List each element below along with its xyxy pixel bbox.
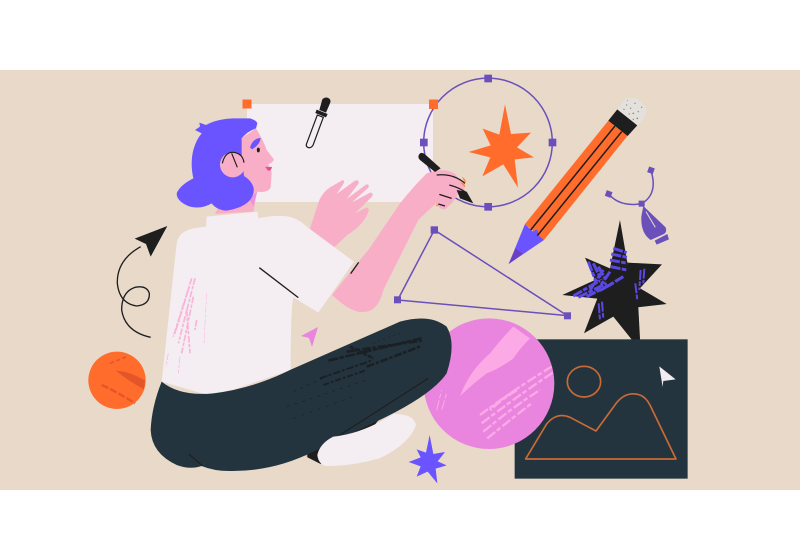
back foot <box>300 447 310 458</box>
finger lines <box>437 175 465 206</box>
stylus pen <box>418 153 441 172</box>
eyebrow <box>250 138 261 149</box>
icon: picture mountains <box>526 394 676 459</box>
icon: orange star <box>469 104 534 188</box>
head and hair <box>177 118 274 214</box>
paper artboard with handles <box>242 100 438 202</box>
pink textured planet <box>424 318 554 449</box>
icon: pen tool nib with bezier curve <box>605 166 669 245</box>
eye <box>257 148 260 152</box>
ear <box>220 152 245 177</box>
icon: picture sun <box>567 366 601 397</box>
mouth <box>265 167 272 171</box>
icon: curly arrow <box>117 226 167 337</box>
shoe <box>317 414 416 466</box>
face <box>242 128 274 192</box>
icon: black textured star <box>562 220 667 351</box>
icon: orange planet <box>88 352 146 409</box>
vector triangle with anchor points <box>394 226 571 319</box>
lower body <box>151 318 452 471</box>
fingernails <box>436 177 466 207</box>
sleeve lines <box>259 262 359 298</box>
icon: blue star <box>409 435 447 483</box>
person <box>151 118 473 471</box>
collar shadow <box>249 192 257 206</box>
hair <box>177 118 257 211</box>
shirt <box>162 212 359 397</box>
raised arm and hand <box>332 153 473 312</box>
vector circle with handles and orange star <box>420 75 556 211</box>
neck <box>215 190 257 214</box>
icon: eyedropper <box>306 97 331 148</box>
far hand <box>310 180 373 250</box>
trouser crease lines <box>189 378 428 466</box>
small pink triangle <box>301 327 318 347</box>
shirt pink texture <box>166 278 207 373</box>
trouser texture <box>287 332 422 418</box>
sock <box>307 418 380 464</box>
dark image panel with picture icon <box>515 339 688 479</box>
icon: pencil <box>509 98 646 264</box>
trousers <box>151 318 452 471</box>
icon: cursor arrow <box>659 366 676 387</box>
